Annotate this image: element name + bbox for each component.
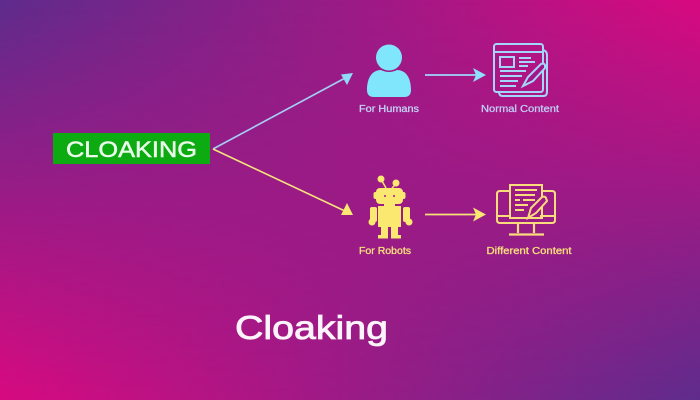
icon: robot [368, 176, 412, 238]
badge: CLOAKING: CLOAKING [66, 137, 197, 162]
icon: normal content page [494, 44, 547, 96]
icon: human [367, 44, 411, 97]
label: For Humans: For Humans [359, 104, 419, 115]
badge: CLOAKING [53, 133, 210, 164]
arrow: to robots [213, 149, 353, 215]
arrow: robots to different content [425, 208, 486, 222]
icon: different content monitor [497, 185, 555, 234]
arrow: humans to normal content [425, 68, 486, 82]
arrow: to humans [213, 73, 353, 149]
label: Normal Content: Normal Content [481, 104, 559, 115]
title: Cloaking [235, 309, 388, 346]
label: For Robots: For Robots [359, 246, 411, 257]
label: Different Content: Different Content [486, 246, 572, 257]
